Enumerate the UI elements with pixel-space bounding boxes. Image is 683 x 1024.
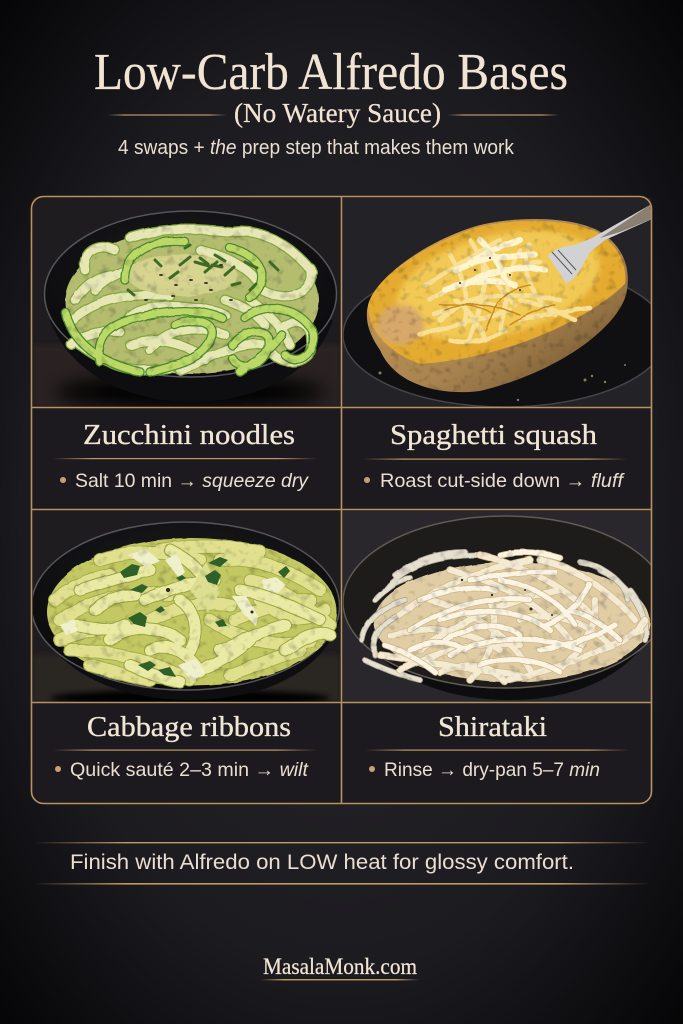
tagline: 4 swaps + the prep step that makes them work: [118, 137, 515, 159]
prep step: Salt 10 min → squeeze dry: [75, 470, 309, 492]
squash shell: [367, 219, 628, 392]
photo: cabbage ribbons bowl: [32, 511, 340, 706]
card: spaghetti squash: [343, 198, 667, 492]
card: shirataki: [343, 511, 670, 781]
bullet dot: [369, 766, 375, 772]
title rule: [53, 458, 317, 459]
fork: [548, 205, 652, 283]
bullet dot: [60, 477, 66, 483]
prep step: Roast cut-side down → fluff: [380, 470, 626, 492]
photo: shirataki noodles bowl: [343, 511, 670, 702]
title: Low-Carb Alfredo Bases: [94, 44, 568, 101]
parsley flecks: [120, 557, 290, 677]
panel: four base swaps grid: [32, 196, 670, 804]
prep step: Rinse → dry-pan 5–7 min: [384, 759, 600, 781]
card title: Zucchini noodles: [83, 419, 295, 451]
bullet dot: [364, 477, 370, 483]
card title: Shirataki: [438, 711, 547, 743]
plate crumbs: [378, 364, 626, 401]
subtitle with flanking rules: (No Watery Sauce): [234, 98, 441, 128]
bullet dot: [55, 766, 61, 772]
card title: Spaghetti squash: [390, 419, 598, 451]
panel frame and dividers: [32, 196, 652, 804]
pale cabbage leaves: [60, 549, 286, 681]
plate: [343, 287, 651, 407]
footer: website: MasalaMonk.com: [263, 954, 417, 979]
card title: Cabbage ribbons: [87, 711, 291, 743]
photo: zucchini noodles bowl: [33, 198, 340, 408]
title rule: [53, 750, 317, 751]
photo: roasted spaghetti squash with fork: [343, 198, 667, 407]
squash flesh: [368, 221, 625, 364]
header: [94, 44, 568, 159]
callout: finish tip: Finish with Alfredo on LOW heat for glossy comfort.: [70, 851, 574, 874]
card: cabbage ribbons: [32, 511, 340, 781]
title rule: [363, 458, 627, 460]
prep step: Quick sauté 2–3 min → wilt: [70, 759, 310, 781]
card: zucchini noodles: [33, 198, 340, 492]
title rule: [365, 750, 629, 751]
